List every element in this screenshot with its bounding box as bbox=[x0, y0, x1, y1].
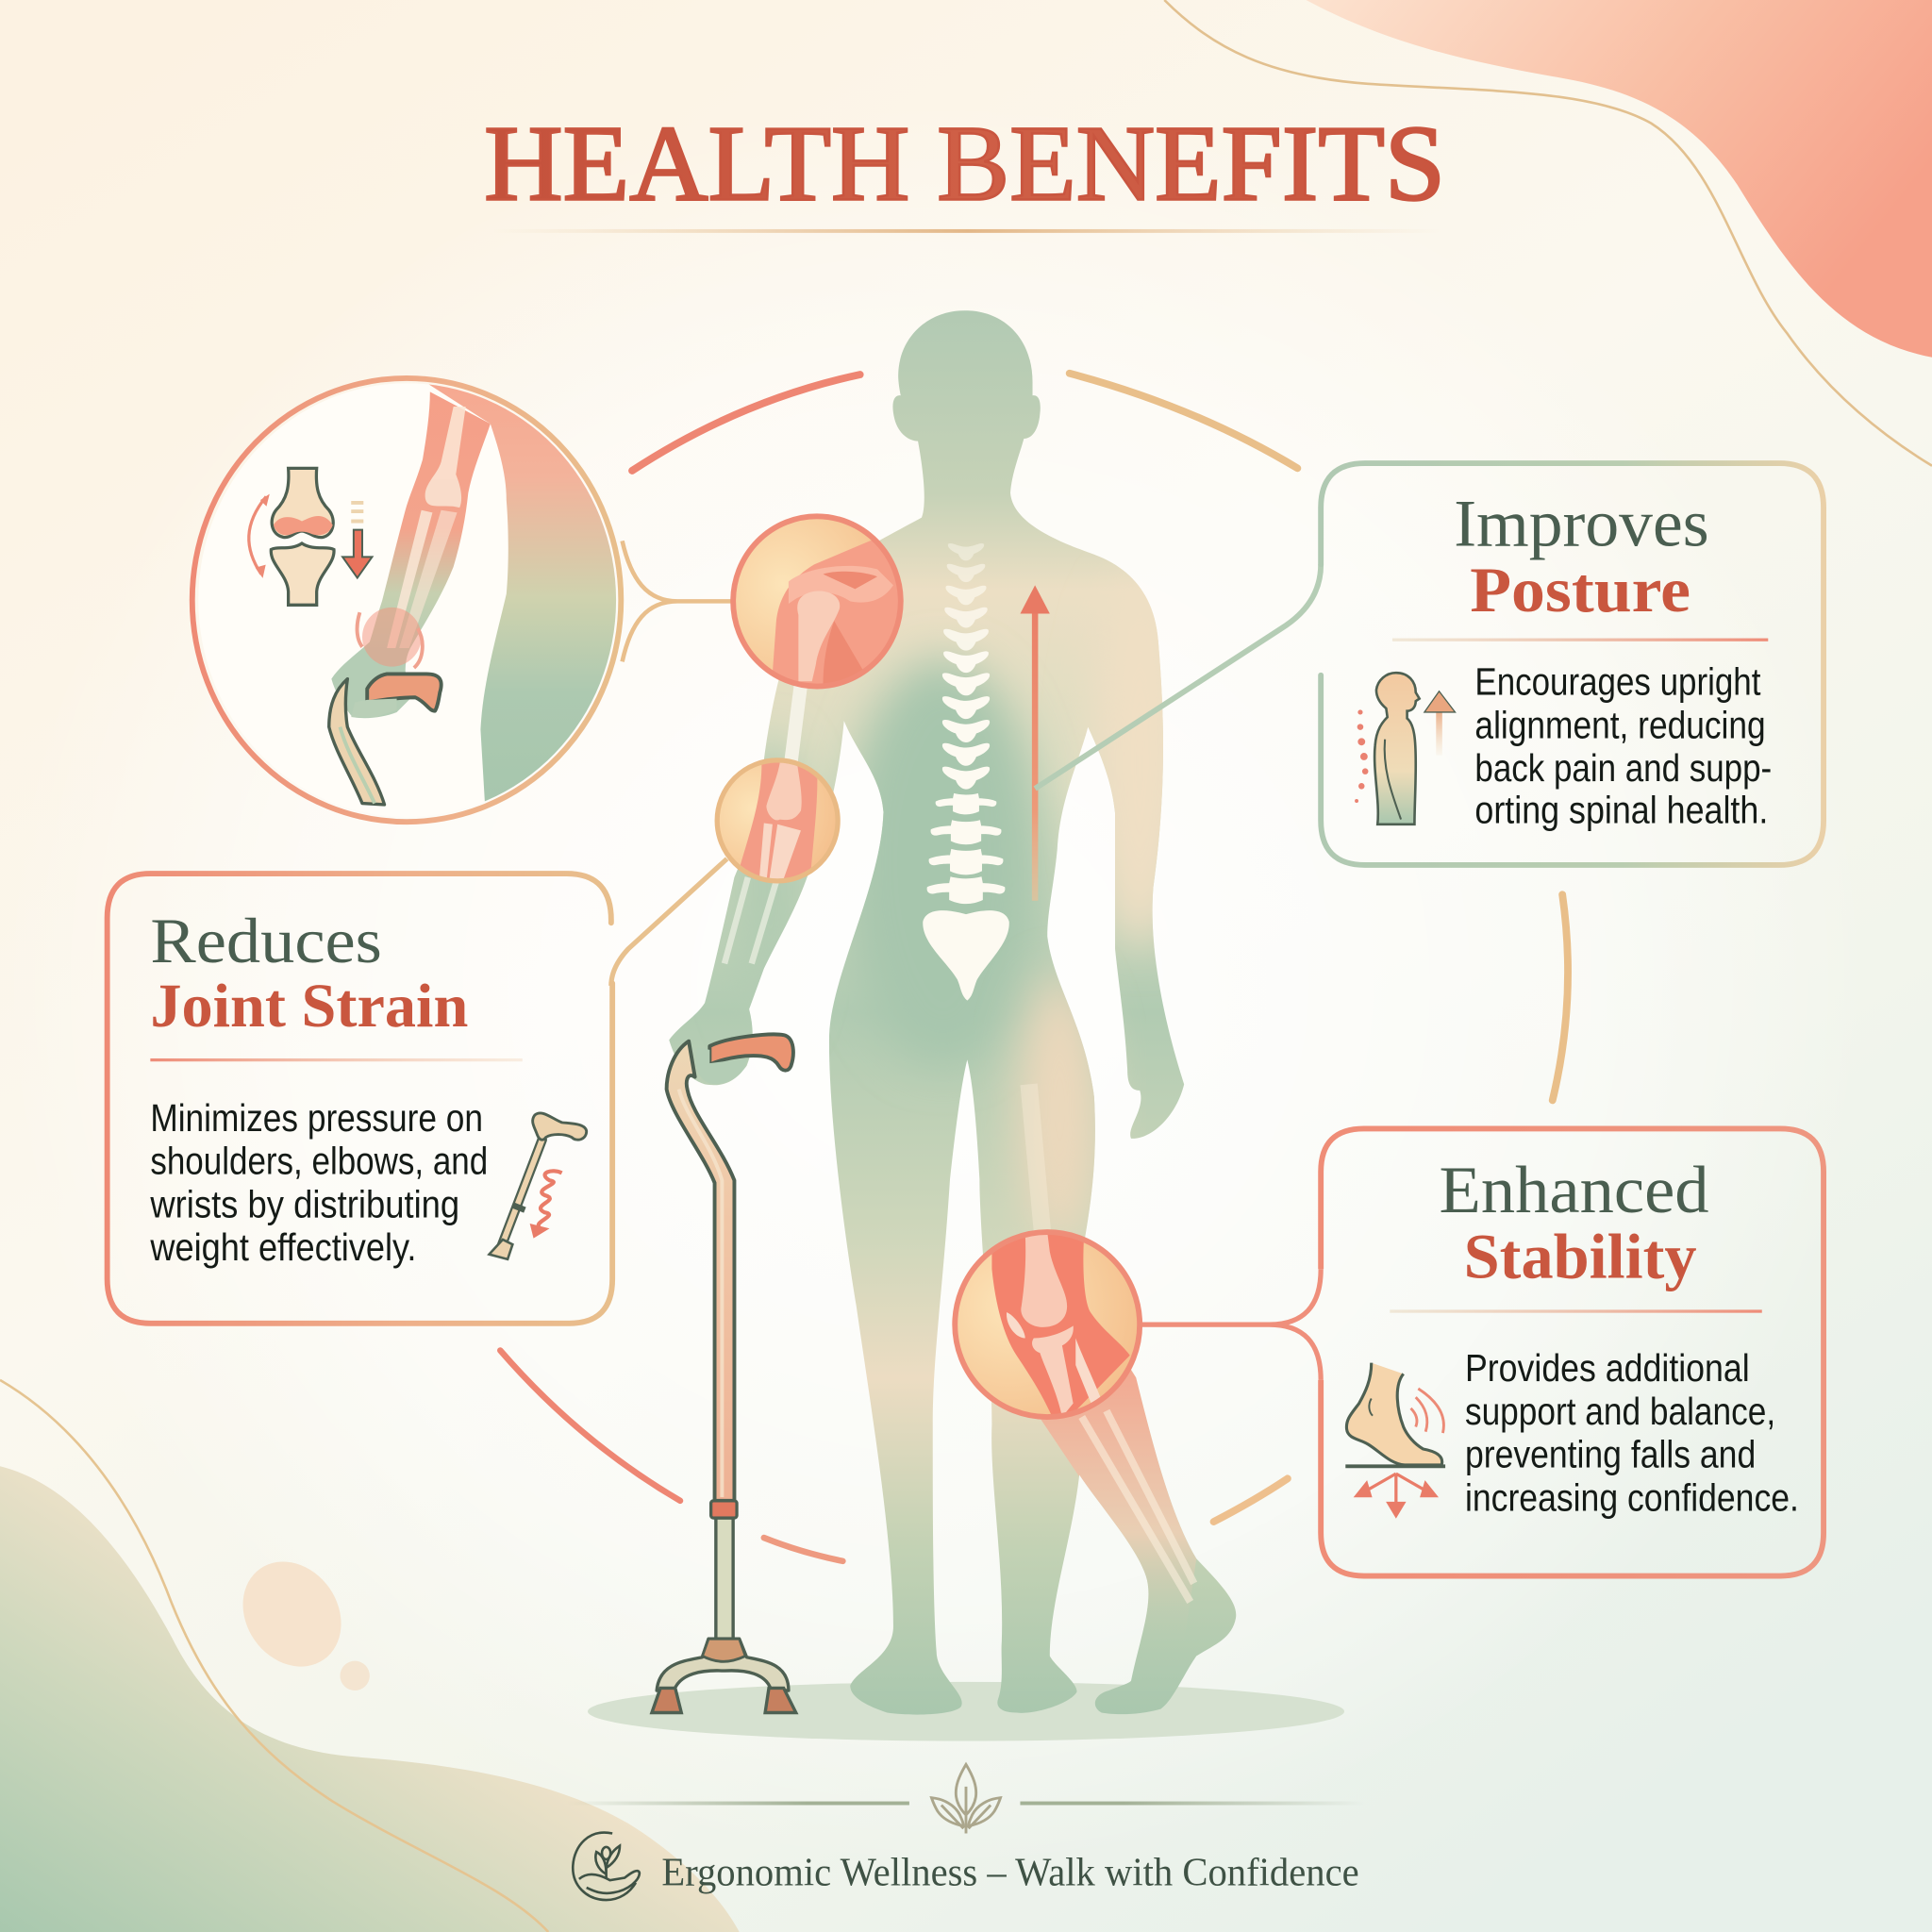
card: improves posture: Improves bbox=[1454, 488, 1709, 561]
connector: shoulder to magnified circle bbox=[623, 541, 734, 661]
spine bbox=[923, 543, 1009, 1001]
icon: upright posture figure bbox=[1355, 673, 1456, 824]
card: enhanced stability: preventing falls and bbox=[1465, 1433, 1756, 1476]
cane shaft bbox=[667, 1041, 734, 1501]
card: enhanced stability: Stability bbox=[1464, 1220, 1697, 1291]
connector: elbow to joint strain card bbox=[611, 858, 727, 986]
card: enhanced stability: support and balance, bbox=[1465, 1390, 1775, 1433]
icon: small cane with spring bbox=[490, 1113, 587, 1259]
card: improves posture: Encourages upright bbox=[1474, 660, 1760, 704]
connector: knee to stability card bbox=[1140, 1269, 1321, 1380]
arm bones bbox=[387, 407, 466, 648]
card: reduces joint strain: Minimizes pressure on bbox=[150, 1096, 483, 1140]
posture arrow bbox=[1020, 585, 1050, 901]
card: improves posture: Posture bbox=[1470, 554, 1690, 625]
card: improves posture bbox=[1321, 463, 1824, 865]
card: reduces joint strain: Joint Strain bbox=[150, 973, 468, 1041]
icon: hand and plant logo bbox=[573, 1833, 640, 1900]
card: reduces joint strain: shoulders, elbows, and bbox=[150, 1140, 488, 1183]
icon: knee joint bbox=[249, 468, 372, 605]
base bbox=[657, 1639, 789, 1690]
human body silhouette bbox=[641, 295, 1257, 1725]
body crescent bbox=[428, 385, 617, 802]
card: enhanced stability: Provides additional bbox=[1465, 1346, 1750, 1390]
handle of cane bbox=[367, 674, 441, 711]
handle bbox=[709, 1034, 793, 1071]
footer brand bbox=[573, 1833, 1359, 1900]
walking cane bbox=[652, 1034, 796, 1713]
card: improves posture: alignment, reducing bbox=[1474, 703, 1766, 746]
shaft highlight bbox=[679, 1090, 722, 1497]
card: reduces joint strain bbox=[108, 874, 612, 1324]
feet bbox=[652, 1688, 681, 1713]
card: improves posture: orting spinal health. bbox=[1474, 788, 1768, 831]
footer divider with leaf icon bbox=[567, 1764, 1365, 1834]
arm bbox=[331, 391, 491, 718]
bottom left decorative wave bbox=[0, 1380, 740, 1932]
card: improves posture: back pain and supp- bbox=[1474, 746, 1772, 790]
hand fingers bbox=[696, 1047, 747, 1084]
title: HEALTH BENEFITS bbox=[484, 104, 1445, 224]
footer brand: Ergonomic Wellness – Walk with Confidence bbox=[661, 1851, 1359, 1894]
card: reduces joint strain: weight effectively. bbox=[149, 1225, 416, 1269]
cane shaft bbox=[329, 679, 385, 805]
callout: shoulder joint bbox=[732, 515, 912, 690]
icon: leaves bbox=[931, 1764, 1001, 1834]
icon: foot with balance arrows bbox=[1345, 1363, 1445, 1516]
card: enhanced stability: Enhanced bbox=[1440, 1154, 1709, 1227]
circle outline bbox=[192, 378, 621, 822]
callout: elbow joint bbox=[717, 754, 838, 887]
card: reduces joint strain: Reduces bbox=[150, 905, 382, 976]
ground shadow bbox=[588, 1682, 1344, 1741]
wrist glow bbox=[362, 608, 422, 667]
fingers bbox=[351, 699, 397, 717]
circular arc segments bbox=[500, 374, 1568, 1561]
card: enhanced stability: increasing confidence. bbox=[1465, 1475, 1799, 1519]
card: enhanced stability bbox=[1321, 1128, 1824, 1576]
magnified circle: arm on cane bbox=[192, 378, 641, 822]
callout: knee joint bbox=[954, 1231, 1141, 1418]
collar bbox=[711, 1501, 737, 1518]
card: reduces joint strain: wrists by distributing bbox=[149, 1182, 459, 1225]
top right decorative wave bbox=[1164, 0, 1932, 466]
lower shaft bbox=[716, 1518, 733, 1639]
connector: posture card to spine bbox=[1035, 564, 1321, 789]
